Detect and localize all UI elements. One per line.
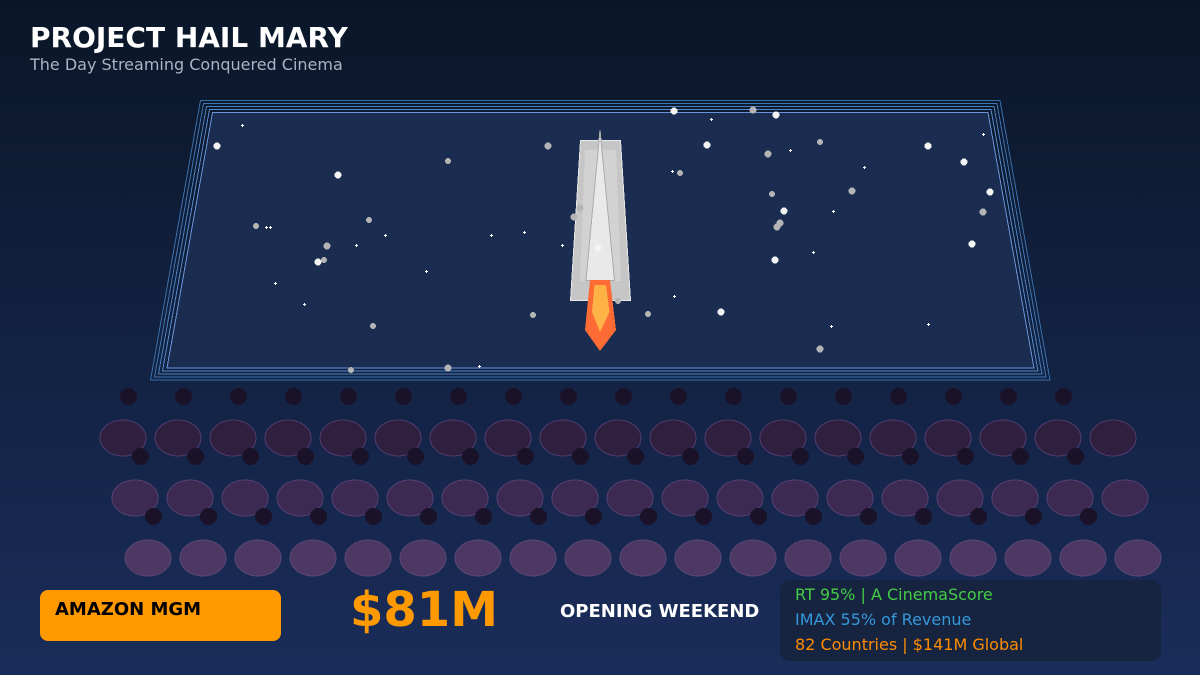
panel: stats (780, 580, 1161, 661)
seats row 3 (125, 540, 1161, 576)
audience heads (120, 388, 1097, 525)
seats row 2 (112, 480, 1148, 516)
stat: ratings: RT 95% | A CinemaScore (795, 585, 993, 604)
badge: Amazon MGM: AMAZON MGM (55, 599, 201, 620)
stars field (214, 106, 994, 373)
flame inner (592, 285, 610, 332)
stat: IMAX: IMAX 55% of Revenue (795, 610, 971, 629)
stat: global: 82 Countries | $141M Global (795, 635, 1023, 654)
subtitle: The Day Streaming Conquered Cinema (29, 55, 343, 74)
flame outer (585, 280, 616, 351)
icon: rocket (570, 130, 630, 351)
panel: cinema screen (150, 100, 1050, 380)
badge: Amazon MGM (40, 590, 281, 641)
opening weekend figure: $81M (350, 582, 498, 638)
opening weekend label: OPENING WEEKEND (560, 601, 759, 622)
seats row 1 (100, 420, 1136, 456)
title: PROJECT HAIL MARY (30, 21, 348, 54)
